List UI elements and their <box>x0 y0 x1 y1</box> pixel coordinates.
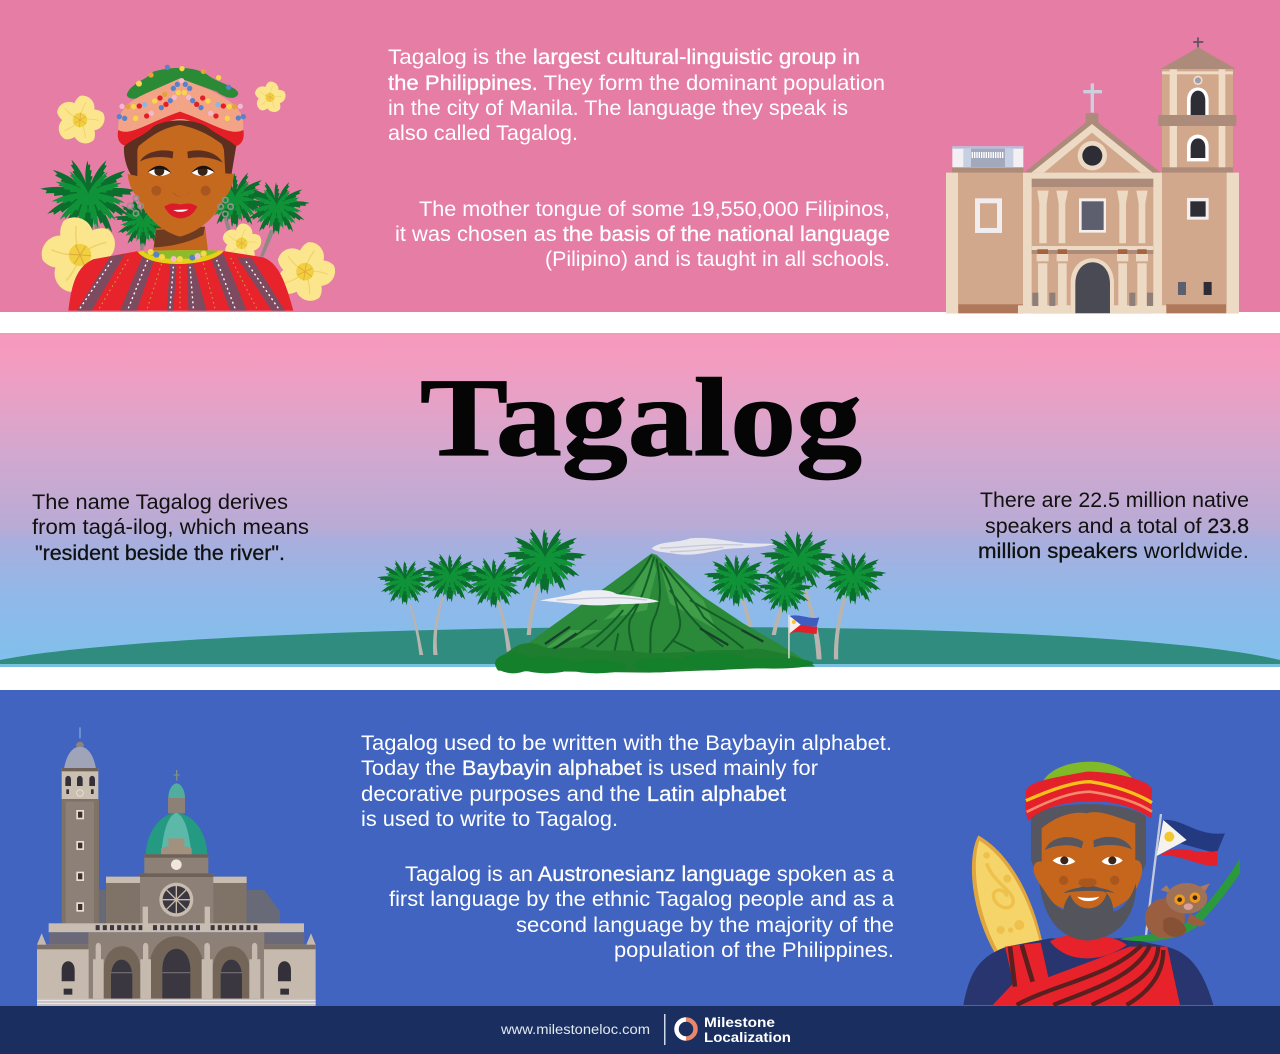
balustrade <box>49 923 304 932</box>
footer website: www.milestoneloc.com <box>500 1022 650 1037</box>
footer bar <box>0 1006 1280 1054</box>
text: Baybayin alphabet: is used to write to Tagalog. <box>361 808 618 831</box>
text: Austronesian language: population of the Philippines. <box>614 939 894 962</box>
palm trees right <box>703 529 887 659</box>
flag of the Philippines <box>788 615 819 658</box>
cheeks and nose <box>1059 876 1119 887</box>
palm trees behind woman <box>40 158 310 257</box>
arches and doors <box>62 936 291 999</box>
eyes <box>1053 856 1123 865</box>
upper wings and rose window <box>106 873 247 925</box>
illustration: Manila Cathedral <box>37 727 316 1006</box>
text: name derivation: "resident beside the river". <box>35 542 285 565</box>
shield <box>972 835 1043 953</box>
text: name derivation: from tagá-ilog, which means <box>32 516 309 539</box>
island ground and sea <box>0 627 1280 667</box>
text: Austronesian language <box>389 863 894 962</box>
text: Tagalog largest group: also called Tagalog. <box>388 122 578 145</box>
cloud on summit <box>652 538 775 555</box>
footer divider <box>664 1014 666 1045</box>
mountain <box>495 553 815 673</box>
title: Tagalog <box>420 356 862 480</box>
lower facade <box>37 932 316 1000</box>
text: Austronesian language: Tagalog is an Austronesianz language spoken as a <box>405 863 894 886</box>
text: Baybayin alphabet: Today the Baybayin alphabet is used mainly for <box>361 757 818 780</box>
hair <box>1031 804 1146 883</box>
text: number of speakers: million speakers worldwide. <box>978 540 1249 563</box>
top pink panel <box>0 0 1280 312</box>
neck <box>153 227 208 263</box>
text: number of speakers <box>978 489 1249 563</box>
text: Baybayin alphabet: Tagalog used to be written with the Baybayin alphabet. <box>361 732 892 755</box>
text: Austronesian language: first language by the ethnic Tagalog people and as a <box>389 888 894 911</box>
eyebrows <box>140 150 223 163</box>
footer brand name: Localization <box>704 1029 791 1045</box>
headdress <box>117 65 246 150</box>
pilasters <box>93 943 260 999</box>
eyes <box>147 166 215 176</box>
text: mother tongue: (Pilipino) and is taught in all schools. <box>545 248 890 271</box>
headband <box>1026 762 1152 821</box>
face <box>1033 812 1142 917</box>
text: number of speakers: speakers and a total of 23.8 <box>985 515 1249 538</box>
steps <box>37 999 316 1006</box>
body with navy shirt <box>963 938 1213 1005</box>
lips <box>164 204 197 218</box>
text: Tagalog largest group <box>388 46 885 145</box>
text: mother tongue <box>395 198 890 271</box>
side terrace <box>952 146 1023 168</box>
columns <box>1018 191 1166 313</box>
bell tower <box>62 727 99 924</box>
illustration: baroque church <box>946 37 1239 313</box>
beard <box>1039 883 1136 941</box>
flag <box>1146 814 1225 935</box>
illustration: Tagalog woman with flowers and palms <box>32 65 346 313</box>
text: Baybayin alphabet <box>361 732 892 831</box>
dome with cross <box>144 770 208 875</box>
footer brand name: Milestone <box>704 1014 775 1030</box>
shadowed roof back <box>99 890 280 923</box>
text: Tagalog largest group: the Philippines. They form the dominant population <box>388 72 885 95</box>
illustration: volcano island with palms and flag <box>376 527 887 673</box>
collar necklace <box>137 249 224 264</box>
plumeria flowers <box>32 79 346 313</box>
text: Tagalog largest group: in the city of Manila. The language they speak is <box>388 97 848 120</box>
face <box>128 124 234 237</box>
cloud on slope <box>540 590 659 605</box>
steps and urns <box>1032 293 1153 306</box>
green leaf branch <box>1120 858 1240 941</box>
text: Baybayin alphabet: decorative purposes and the Latin alphabet <box>361 783 786 806</box>
bottom blue panel <box>0 690 1280 1006</box>
text: Tagalog largest group: Tagalog is the largest cultural-linguistic group in <box>388 46 860 69</box>
text: number of speakers: There are 22.5 million native <box>980 489 1249 512</box>
central facade <box>1023 173 1162 313</box>
bell tower <box>1158 47 1236 169</box>
mouth <box>1063 887 1115 908</box>
tarsier <box>1145 883 1210 938</box>
icon: Milestone logo ring <box>676 1020 696 1038</box>
cheeks and nose <box>151 186 211 197</box>
hair <box>124 143 237 183</box>
text: name derivation: The name Tagalog derives <box>32 491 288 514</box>
text: Austronesian language: second language by the majority of the <box>516 914 894 937</box>
text: mother tongue: The mother tongue of some 19,550,000 Filipinos, <box>419 198 890 221</box>
illustration: Tagalog man with shield, flag and tarsier <box>963 762 1240 1005</box>
palm trees left <box>376 527 587 655</box>
pediment with rose window and cross <box>1024 83 1161 173</box>
text: mother tongue: it was chosen as the basis of the national language <box>395 223 890 246</box>
text: name derivation <box>32 491 309 565</box>
red sash <box>993 935 1180 1005</box>
middle sky panel <box>0 333 1280 667</box>
footer brand name <box>704 1014 791 1045</box>
eyebrows <box>1045 837 1132 850</box>
earrings <box>127 196 233 217</box>
cross on tower <box>1193 37 1203 47</box>
main walls <box>946 167 1239 313</box>
side windows <box>975 198 1212 295</box>
dress <box>68 251 293 311</box>
